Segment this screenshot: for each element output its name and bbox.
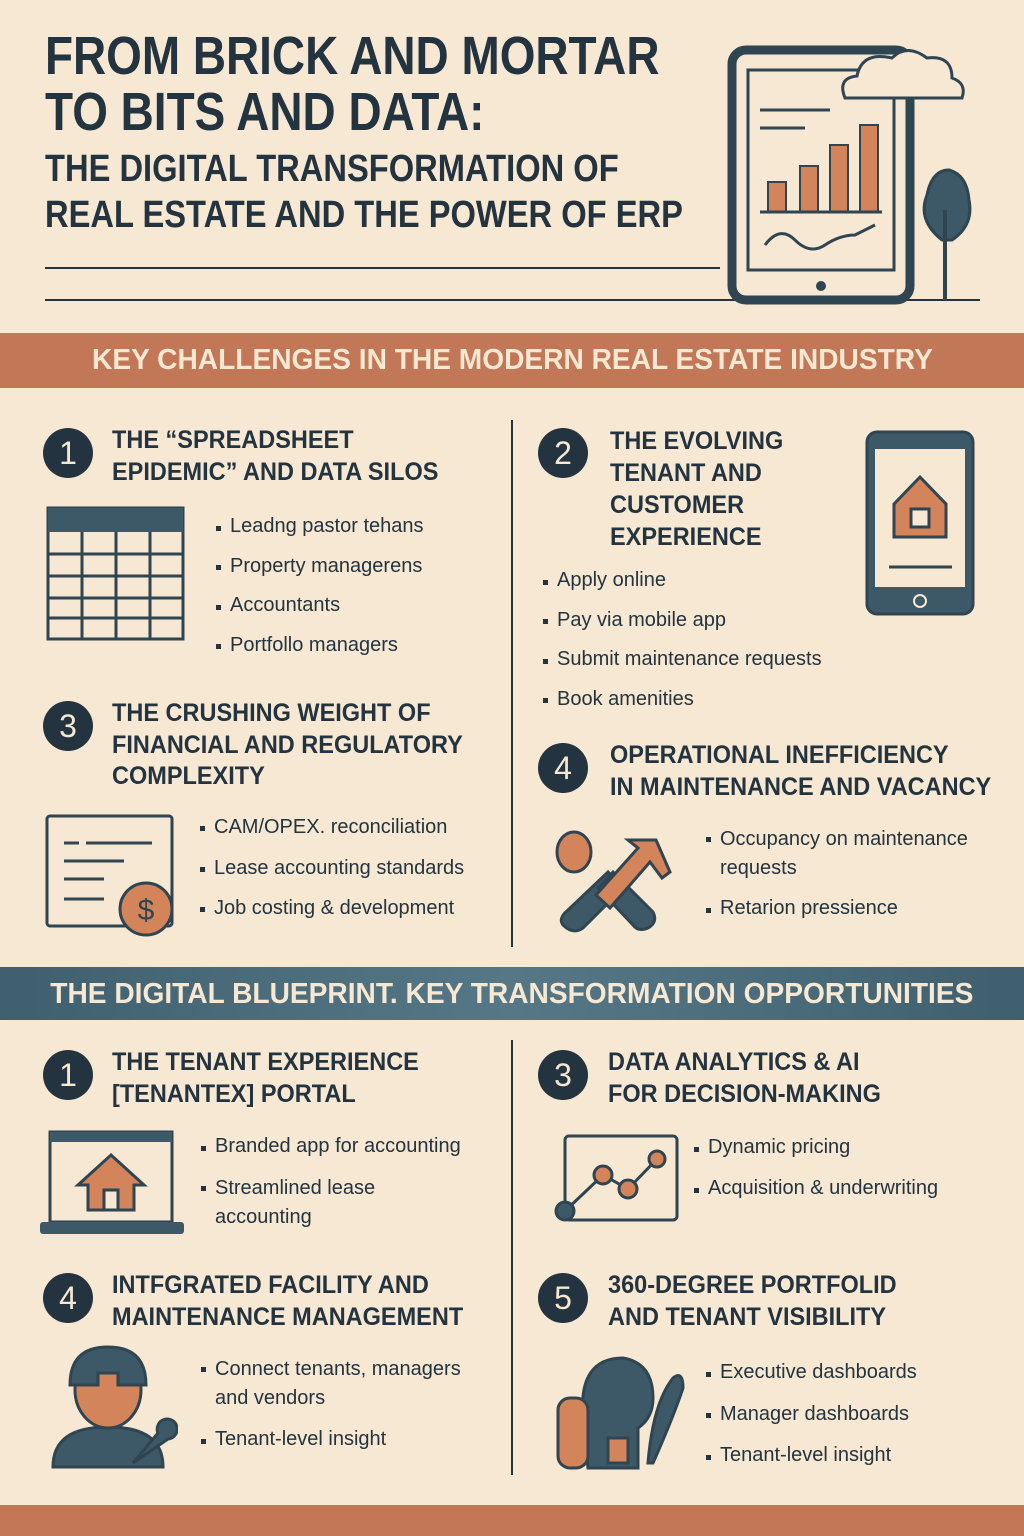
icon: spreadsheet: [46, 506, 184, 640]
icon: tools: [556, 830, 672, 932]
panel: opportunity 4: Tenant-level insight: [215, 1428, 386, 1450]
panel: opportunity 1: Streamlined lease: [215, 1177, 375, 1199]
banner: key challenges: KEY CHALLENGES IN THE MODERN REAL ESTATE INDUSTRY: [92, 344, 932, 376]
panel: challenge 4: Retarion pressience: [720, 897, 898, 919]
title: FROM BRICK AND MORTAR: [45, 26, 659, 86]
panel: opportunity 4: [43, 1271, 463, 1468]
panel: opportunity 1: THE TENANT EXPERIENCE: [112, 1048, 419, 1076]
panel: opportunity 3: Dynamic pricing: [708, 1136, 850, 1158]
panel: opportunity 5: 5: [554, 1280, 572, 1316]
banner: key challenges: [0, 333, 1024, 388]
panel: opportunity 5: Executive dashboards: [720, 1361, 917, 1383]
banner: digital blueprint: [0, 967, 1024, 1020]
panel: challenge 2: TENANT AND: [610, 459, 762, 487]
panel: opportunity 1: 1: [59, 1057, 77, 1093]
footer band: [0, 1505, 1024, 1536]
panel: challenge 1: THE “SPREADSHEET: [112, 426, 354, 454]
panel: challenge 2: EXPERIENCE: [610, 523, 762, 551]
panel: opportunity 1: [40, 1048, 461, 1234]
panel: challenge 2: [538, 427, 974, 710]
icon: phone with house: [866, 430, 974, 616]
panel: challenge 4: 4: [554, 750, 572, 786]
panel: challenge 4: OPERATIONAL INEFFICIENCY: [610, 741, 949, 769]
panel: challenge 4: [538, 741, 991, 932]
title: REAL ESTATE AND THE POWER OF ERP: [45, 194, 683, 236]
panel: challenge 3: [43, 699, 464, 936]
panel: opportunity 5: 360-DEGREE PORTFOLID: [608, 1271, 897, 1299]
panel: opportunity 4: INTFGRATED FACILITY AND: [112, 1271, 429, 1299]
panel: challenge 2: Book amenities: [557, 688, 694, 710]
panel: opportunity 4: Connect tenants, managers: [215, 1358, 461, 1380]
panel: challenge 1: Property managerens: [230, 554, 422, 576]
panel: challenge 3: THE CRUSHING WEIGHT OF: [112, 699, 431, 727]
panel: challenge 3: Job costing & development: [214, 897, 454, 919]
title: TO BITS AND DATA:: [45, 82, 484, 142]
icon: invoice with dollar coin: $: [138, 894, 155, 927]
panel: challenge 3: 3: [59, 708, 77, 744]
icon: maintenance worker: [52, 1346, 178, 1468]
panel: challenge 1: Accountants: [230, 594, 340, 616]
panel: challenge 3: Lease accounting standards: [214, 856, 464, 878]
panel: opportunity 5: Manager dashboards: [720, 1402, 909, 1424]
icon: invoice with dollar coin: [46, 814, 174, 936]
panel: opportunity 1: Branded app for accounting: [215, 1135, 461, 1157]
panel: challenge 4: IN MAINTENANCE AND VACANCY: [610, 772, 991, 800]
panel: opportunity 3: Acquisition & underwriting: [708, 1177, 938, 1199]
panel: challenge 1: Portfollo managers: [230, 634, 398, 656]
panel: challenge 2: Submit maintenance requests: [557, 648, 822, 670]
panel: opportunity 4: 4: [59, 1280, 77, 1316]
panel: challenge 2: 2: [554, 435, 572, 471]
panel: challenge 3: FINANCIAL AND REGULATORY: [112, 730, 463, 758]
panel: opportunity 1: accounting: [215, 1206, 312, 1228]
panel: opportunity 4: MAINTENANCE MANAGEMENT: [112, 1302, 463, 1330]
title: THE DIGITAL TRANSFORMATION OF: [45, 148, 619, 190]
panel: challenge 2: THE EVOLVING: [610, 427, 783, 455]
panel: opportunity 5: AND TENANT VISIBILITY: [608, 1302, 886, 1330]
panel: opportunity 5: [538, 1271, 917, 1470]
icon: tablet with chart, cloud and tree: [728, 46, 972, 304]
panel: challenge 1: [43, 426, 438, 656]
panel: challenge 1: 1: [59, 435, 77, 471]
banner: digital blueprint: THE DIGITAL BLUEPRINT. KEY TRANSFORMATION OPPORTUNITIES: [50, 978, 974, 1010]
icon: head and dashboard: [556, 1356, 684, 1470]
panel: opportunity 4: and vendors: [215, 1387, 325, 1409]
icon: line chart: [554, 1134, 678, 1222]
panel: challenge 3: COMPLEXITY: [112, 762, 265, 790]
panel: challenge 2: Apply online: [557, 569, 666, 591]
panel: challenge 1: EPIDEMIC” AND DATA SILOS: [112, 458, 438, 486]
title: [45, 26, 683, 236]
panel: challenge 4: requests: [720, 856, 797, 878]
panel: challenge 3: CAM/OPEX. reconciliation: [214, 816, 447, 838]
panel: opportunity 3: FOR DECISION-MAKING: [608, 1080, 881, 1108]
panel: opportunity 5: Tenant-level insight: [720, 1444, 891, 1466]
panel: opportunity 1: [TENANTEX] PORTAL: [112, 1080, 356, 1108]
panel: opportunity 3: DATA ANALYTICS & AI: [608, 1048, 860, 1076]
panel: challenge 1: Leadng pastor tehans: [230, 515, 424, 537]
panel: challenge 4: Occupancy on maintenance: [720, 828, 968, 850]
panel: challenge 2: Pay via mobile app: [557, 608, 726, 630]
icon: laptop with house: [40, 1130, 184, 1234]
panel: opportunity 3: 3: [554, 1057, 572, 1093]
panel: challenge 2: CUSTOMER: [610, 491, 744, 519]
panel: opportunity 3: [538, 1048, 938, 1222]
